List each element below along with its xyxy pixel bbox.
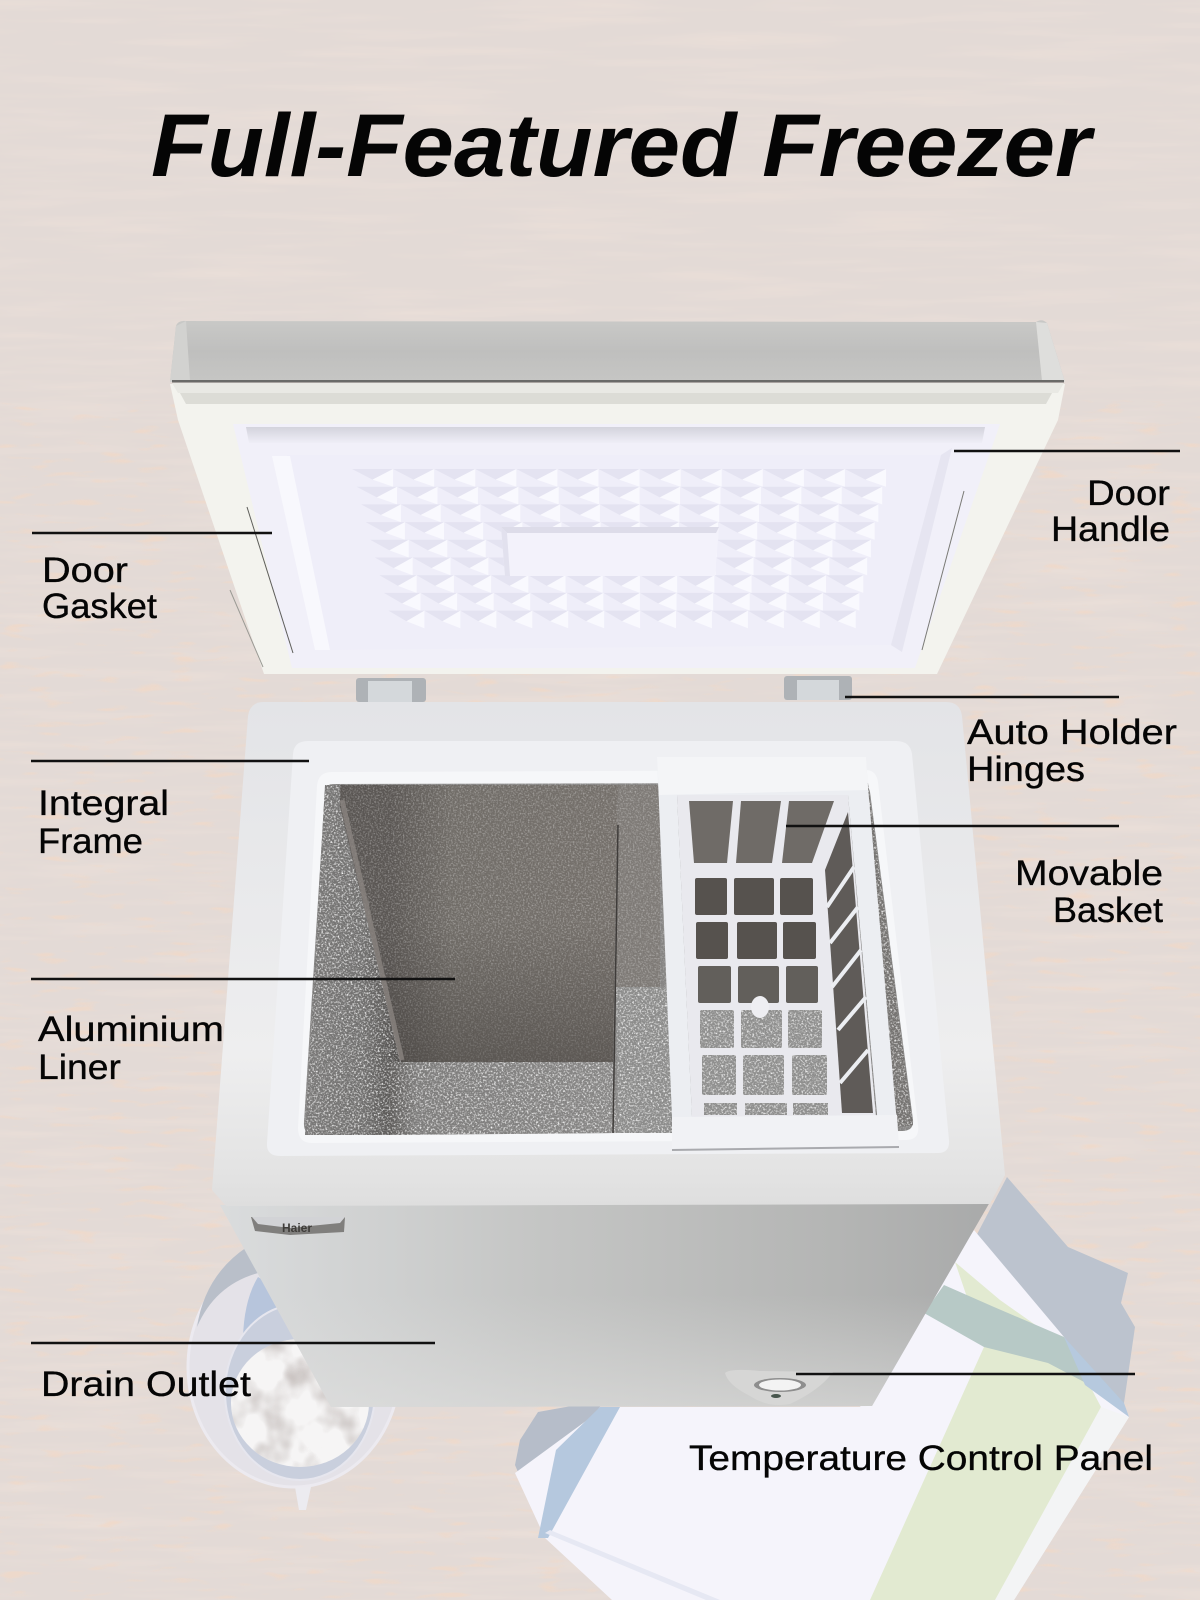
title: Full-Featured Freezer: [151, 95, 1096, 195]
callout: Auto Holder Hinges: [845, 697, 1177, 789]
freezer: [170, 320, 1065, 1407]
front panel of cabinet: [220, 1202, 990, 1407]
callout: Integral Frame: Integral: [38, 783, 169, 823]
liner floor: [389, 1062, 618, 1135]
cabinet top frame: [212, 702, 1005, 1206]
basket back wall openings: [689, 801, 834, 863]
right hinge: [784, 676, 852, 700]
freezer lid: [170, 320, 1065, 674]
right wall strip: [850, 783, 913, 1130]
callout: Aluminium Liner: [31, 979, 455, 1087]
callout: Auto Holder Hinges: Auto Holder: [967, 712, 1177, 752]
callout: Movable Basket: Movable: [1015, 853, 1163, 893]
lid handle band: [170, 320, 1065, 404]
callout: Door Gasket: Gasket: [42, 586, 157, 626]
basket drain hole: [751, 996, 769, 1018]
background prop: books: [515, 1177, 1135, 1600]
callout: Integral Frame: [31, 761, 309, 861]
callout: Integral Frame: Frame: [38, 821, 143, 861]
callout: Drain Outlet: Drain Outlet: [41, 1364, 251, 1404]
callout: Door Handle: Door: [1087, 473, 1170, 513]
basket rim: [657, 757, 899, 1149]
callout: Door Handle: Handle: [1051, 509, 1170, 549]
temperature control dial: [725, 1370, 833, 1405]
lid diamond emboss pattern: [352, 469, 886, 628]
back wall: [340, 785, 618, 1062]
basket right side slats: [825, 812, 873, 1113]
aluminium liner interior: [304, 783, 913, 1135]
callout: Temperature Control Panel: Temperature Control Panel: [689, 1438, 1153, 1478]
callout: Movable Basket: Basket: [1053, 890, 1163, 930]
brand badge: [251, 1217, 345, 1235]
lid gasket and outer frame: [170, 384, 1065, 674]
callout: Door Gasket: [32, 533, 272, 626]
callout: Door Gasket: Door: [42, 550, 128, 590]
movable basket: [657, 757, 899, 1150]
left wall: [305, 785, 401, 1135]
compressor step: [613, 785, 680, 1133]
left hinge: [356, 678, 426, 702]
basket floor openings: [695, 878, 828, 1115]
lid inner liner: [230, 424, 1000, 668]
lid centre label plate: [501, 527, 719, 576]
callout: Door Handle: [954, 451, 1180, 549]
brand badge: Haier: [282, 1221, 312, 1235]
callout: Movable Basket: [786, 826, 1163, 930]
callout: Auto Holder Hinges: Hinges: [967, 749, 1085, 789]
basket shadowed interior: [677, 795, 876, 1117]
callout: Aluminium Liner: Liner: [38, 1047, 121, 1087]
callout: Aluminium Liner: Aluminium: [38, 1009, 224, 1049]
background prop: bowl: [188, 1247, 400, 1510]
